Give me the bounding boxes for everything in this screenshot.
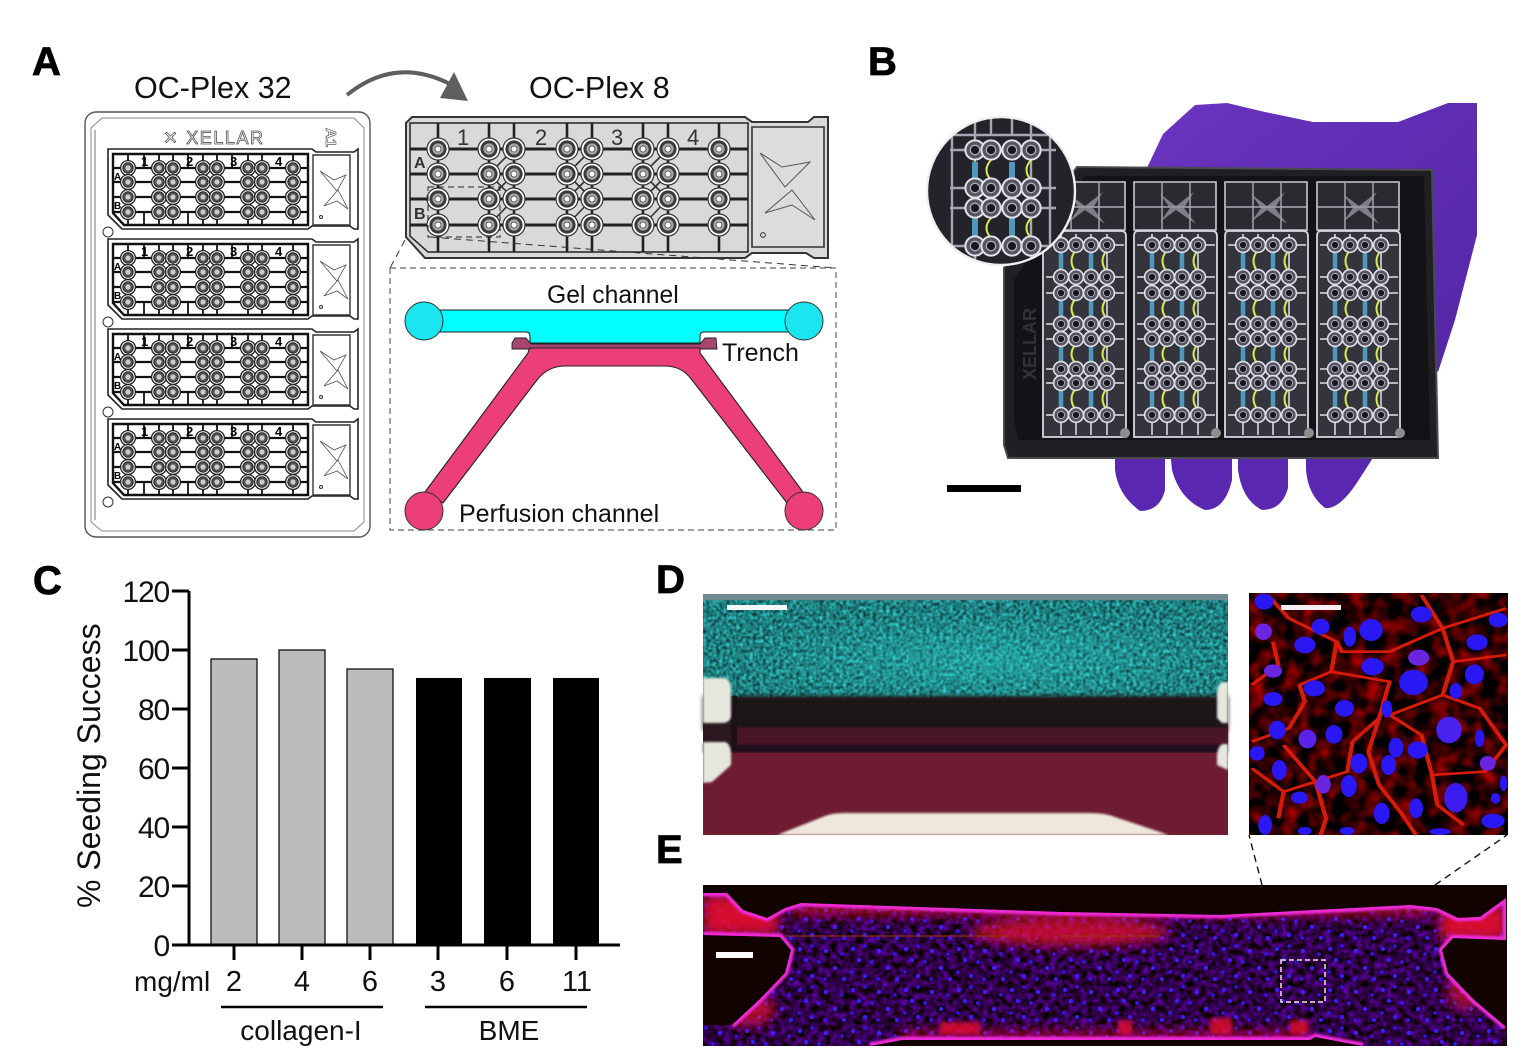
sub-plate 1: 1	[141, 154, 148, 169]
channel wall highlight	[703, 893, 1506, 1046]
zoom guide lines	[390, 237, 836, 268]
actin-rich upper band	[703, 895, 1506, 1039]
sub-plate 2: 4	[275, 244, 283, 259]
gel channel	[405, 302, 823, 343]
strip numbers and rows: 3	[611, 125, 623, 150]
strip 4	[1317, 182, 1400, 437]
sub-plate 3: A	[114, 352, 121, 363]
sub-plate 3: 4	[275, 334, 283, 349]
nuclei	[1250, 594, 1508, 835]
strip 1	[1043, 182, 1126, 437]
panel D: brightfield channel image	[703, 594, 1228, 835]
heading: OC-Plex 32: OC-Plex 32	[134, 71, 292, 105]
y-axis tick labels: 20	[138, 871, 170, 904]
perfusion channel	[405, 345, 823, 530]
y-axis title: % Seeding Success	[71, 623, 107, 908]
strip numbers and rows: 4	[687, 125, 699, 150]
circular magnified inset	[927, 110, 1075, 270]
sub-plate 2: A	[114, 262, 121, 273]
tray logo: XELLAR: XELLAR	[1020, 308, 1040, 380]
zoom guide lines: E to D	[1249, 835, 1507, 885]
strip 3	[1225, 182, 1308, 437]
selection box	[1281, 960, 1325, 1002]
label: Gel channel: Gel channel	[547, 282, 679, 309]
strip 2	[1134, 182, 1217, 437]
strip numbers and rows: A	[414, 155, 426, 172]
brown line under the upper band	[785, 935, 1160, 937]
logo: XELLAR: ✕ XELLAR	[163, 128, 263, 148]
sub-plate 2: 3	[230, 244, 237, 259]
panel: photo of plate held in gloved hand	[927, 103, 1477, 511]
y-axis tick labels: 120	[123, 576, 170, 609]
sub-plate 2: B	[114, 291, 121, 302]
sub-plate 4: 1	[141, 424, 148, 439]
sub-plate 2: 2	[186, 244, 193, 259]
panel E: whole-channel immunofluorescence	[703, 885, 1507, 1046]
glove: upper hand	[1145, 103, 1477, 372]
sub-plate 4: B	[114, 471, 121, 482]
panel label: E: E	[656, 828, 683, 872]
icon: pinwheel logo	[760, 153, 815, 220]
panel label: C: C	[33, 559, 62, 603]
panel label: A: A	[32, 40, 61, 84]
sub-plate 1: A	[114, 172, 121, 183]
scale bar	[1281, 605, 1341, 610]
y-axis tick labels: 40	[138, 812, 170, 845]
bars: collagen-I	[211, 650, 393, 945]
unit label: mg/ml	[134, 966, 210, 997]
sub-plate 3: 1	[141, 334, 148, 349]
sub-plate 1: 3	[230, 154, 237, 169]
panel label: D: D	[656, 558, 685, 602]
bar chart: seeding success	[71, 576, 620, 1046]
diagram: OC-Plex 8 strip	[406, 117, 828, 258]
panel D: confocal close-up	[1249, 593, 1508, 835]
sub-plate 2: 1	[141, 244, 148, 259]
panel: channel schematic inset	[390, 268, 836, 530]
y-axis tick labels: 0	[154, 930, 170, 963]
arrow: OC-Plex 32 to OC-Plex 8	[347, 72, 468, 101]
gel region	[703, 600, 1228, 698]
x-axis tick labels	[226, 966, 592, 998]
trench	[512, 338, 717, 349]
strip numbers and rows: 1	[457, 125, 469, 150]
sub-plate 4	[108, 419, 358, 499]
sub-plate 4: A	[114, 442, 121, 453]
sub-plate 3: 2	[186, 334, 193, 349]
label: Perfusion channel: Perfusion channel	[459, 500, 659, 528]
heading: OC-Plex 8: OC-Plex 8	[529, 71, 670, 105]
x-axis tick labels: 3	[430, 966, 446, 998]
sub-plate 1: B	[114, 201, 121, 212]
glass walls	[703, 678, 1228, 835]
x-axis tick labels: 2	[226, 966, 242, 998]
sub-plate 3: B	[114, 381, 121, 392]
x-axis tick labels: 6	[499, 966, 515, 998]
strip numbers and rows: B	[414, 206, 426, 223]
label: Trench: Trench	[722, 339, 799, 367]
bars: BME	[416, 678, 599, 945]
y-axis tick labels: 100	[123, 635, 170, 668]
sub-plate 1	[108, 149, 358, 229]
red patches along the lower wall	[940, 1018, 1308, 1034]
sub-plate 4: 2	[186, 424, 193, 439]
sub-plate 2	[108, 239, 358, 319]
scale bar: panel B	[947, 485, 1021, 492]
group: collagen-I: collagen-I	[240, 1015, 362, 1046]
x-axis tick labels: 4	[294, 966, 310, 998]
sub-plate 3: 3	[230, 334, 237, 349]
strip numbers and rows	[414, 125, 699, 223]
diagram: OC-Plex 32 plate	[85, 112, 370, 537]
y-axis tick labels	[123, 576, 170, 963]
sub-plate 1: 4	[275, 154, 283, 169]
tray	[1004, 167, 1438, 458]
group: BME: BME	[479, 1015, 539, 1046]
axes	[172, 591, 620, 960]
sub-plate 1: 2	[186, 154, 193, 169]
scale bar	[727, 605, 787, 610]
sub-plate 4: 4	[275, 424, 283, 439]
x-axis tick labels: 6	[362, 966, 378, 998]
y-axis tick labels: 80	[138, 694, 170, 727]
sub-plate 4: 3	[230, 424, 237, 439]
junction network	[1252, 595, 1506, 835]
panel label: B: B	[868, 40, 897, 84]
sub-plate 3	[108, 329, 358, 409]
strip numbers and rows: 2	[535, 125, 547, 150]
scale bar	[716, 952, 753, 958]
glove: fingers	[1115, 450, 1378, 511]
y-axis tick labels: 60	[138, 753, 170, 786]
plate mark: A1: A1	[322, 128, 339, 147]
x-axis tick labels: 11	[562, 966, 592, 998]
